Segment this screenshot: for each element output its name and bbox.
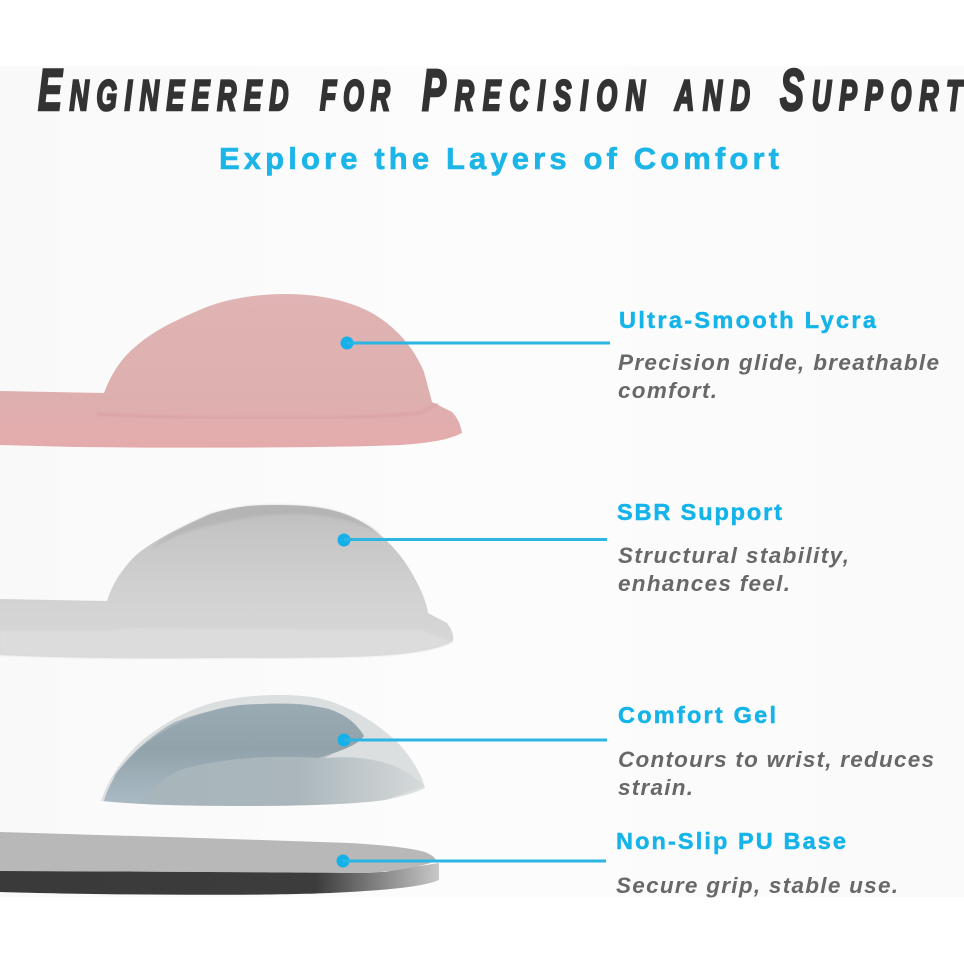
title: ENGINEERED <box>38 58 288 123</box>
title: FOR <box>320 72 390 120</box>
title <box>38 58 964 123</box>
callout: SBR Support <box>338 499 849 596</box>
layer: comfort gel <box>101 695 425 806</box>
title: SUPPORT <box>780 58 964 123</box>
callout: Comfort Gel: strain. <box>618 775 693 800</box>
layer: pink Lycra top <box>0 294 462 448</box>
callout: SBR Support: SBR Support <box>617 499 782 525</box>
layer: gray SBR support <box>0 505 453 658</box>
title: PRECISION <box>422 58 646 123</box>
callout: Ultra-Smooth Lycra: Ultra-Smooth Lycra <box>619 307 877 333</box>
callout: Comfort Gel: Comfort Gel <box>618 702 776 728</box>
title: AND <box>674 72 750 120</box>
layer: non-slip PU base <box>0 832 439 895</box>
callout: Comfort Gel <box>338 702 934 800</box>
callout: SBR Support: enhances feel. <box>618 571 790 596</box>
callout: Ultra-Smooth Lycra: Precision glide, breathable <box>618 350 939 375</box>
callout: Ultra-Smooth Lycra: comfort. <box>618 378 717 403</box>
callout: Non-Slip PU Base: Secure grip, stable use. <box>616 873 898 898</box>
subtitle: Explore the Layers of Comfort <box>219 141 779 176</box>
callout: Ultra-Smooth Lycra <box>340 307 939 403</box>
callout: Non-Slip PU Base <box>336 828 898 898</box>
callout: Non-Slip PU Base: Non-Slip PU Base <box>616 828 846 854</box>
callout: SBR Support: Structural stability, <box>618 543 849 568</box>
callout: Comfort Gel: Contours to wrist, reduces <box>618 747 934 772</box>
